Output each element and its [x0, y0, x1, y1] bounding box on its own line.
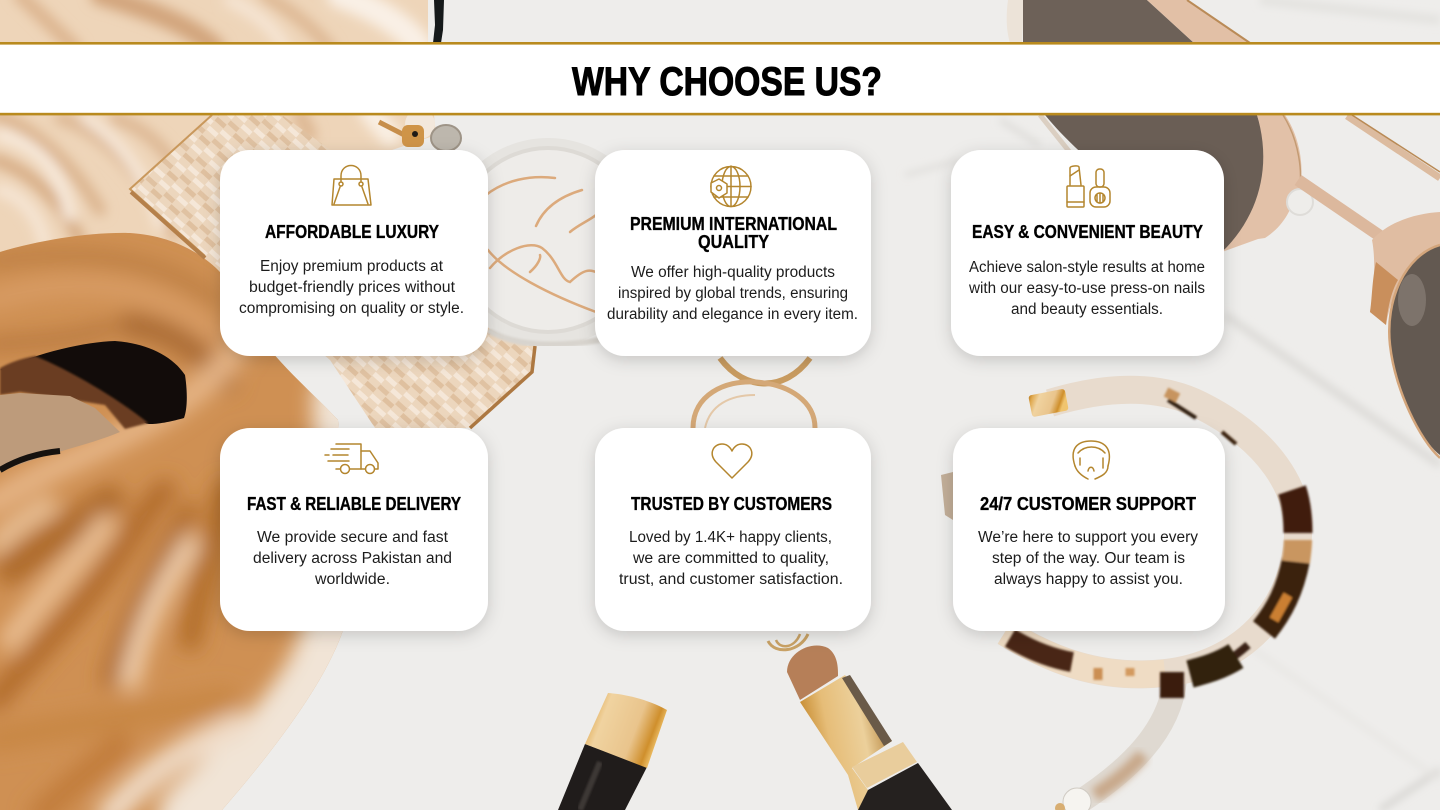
panel: easy and convenient beauty: with our easy-to-use press-on nails	[968, 280, 1205, 297]
panel: 24/7 customer support: 24/7 CUSTOMER SUPPORT	[980, 494, 1196, 514]
title band	[0, 42, 1440, 115]
panel: premium international quality: durability and elegance in every item.	[607, 306, 858, 323]
panel: affordable luxury: budget-friendly prices without	[249, 279, 456, 296]
tortoise bracelet	[1005, 389, 1298, 810]
panel: 24/7 customer support: always happy to assist you.	[994, 571, 1183, 588]
panel: easy and convenient beauty: Achieve salon-style results at home	[969, 259, 1205, 276]
icon: handbag	[332, 166, 371, 205]
title: WHY CHOOSE US?	[572, 60, 882, 104]
panel: 24/7 customer support	[953, 428, 1225, 631]
panel: premium international quality: PREMIUM INTERNATIONAL	[630, 214, 837, 234]
panel: trusted by customers: TRUSTED BY CUSTOMERS	[631, 494, 832, 514]
icon: delivery truck	[325, 444, 378, 474]
panel: affordable luxury: compromising on quality or style.	[239, 300, 464, 317]
icon: globe	[711, 166, 751, 206]
panel: trusted by customers	[595, 428, 871, 631]
panel: easy and convenient beauty: EASY & CONVENIENT BEAUTY	[972, 222, 1203, 242]
charm	[768, 634, 808, 650]
lipstick nude	[787, 645, 952, 810]
icon: lipstick and nail polish	[1067, 166, 1110, 207]
glass dish	[443, 138, 653, 346]
wicker box	[130, 115, 535, 428]
panel: trusted by customers: Loved by 1.4K+ happy clients,	[629, 529, 832, 546]
panel: 24/7 customer support: We’re here to support you every	[978, 529, 1198, 546]
panel: trusted by customers: trust, and customer satisfaction.	[619, 571, 843, 588]
panel: premium international quality: inspired by global trends, ensuring	[618, 285, 848, 302]
panel: affordable luxury: AFFORDABLE LUXURY	[265, 222, 439, 242]
panel: premium international quality: QUALITY	[698, 232, 769, 252]
panel: fast and reliable delivery: We provide secure and fast	[257, 529, 449, 546]
small clip at card edge	[941, 472, 953, 520]
panel: premium international quality: We offer high-quality products	[631, 264, 835, 281]
upper silk	[0, 0, 440, 290]
black sliver at top	[433, 0, 444, 43]
panel: affordable luxury: Enjoy premium products at	[260, 258, 444, 275]
sunglasses	[1007, 0, 1440, 458]
lipstick black	[558, 693, 667, 810]
panel: trusted by customers: we are committed to quality,	[632, 550, 829, 567]
panel: easy and convenient beauty	[951, 150, 1224, 356]
panel: fast and reliable delivery: delivery across Pakistan and	[253, 550, 452, 567]
large silk	[0, 232, 343, 810]
icon: heart	[712, 444, 752, 478]
panel: affordable luxury	[220, 150, 488, 356]
gold rings under centre	[693, 358, 815, 428]
panel: fast and reliable delivery: worldwide.	[314, 571, 390, 588]
earrings	[379, 109, 461, 151]
panel: premium international quality	[595, 150, 871, 356]
icon: headset	[1073, 441, 1109, 479]
panel: easy and convenient beauty: and beauty essentials.	[1011, 301, 1163, 318]
panel: fast and reliable delivery: FAST & RELIABLE DELIVERY	[247, 494, 461, 514]
panel: fast and reliable delivery	[220, 428, 488, 631]
dark silk fold	[0, 341, 187, 472]
panel: 24/7 customer support: step of the way. Our team is	[992, 550, 1185, 567]
